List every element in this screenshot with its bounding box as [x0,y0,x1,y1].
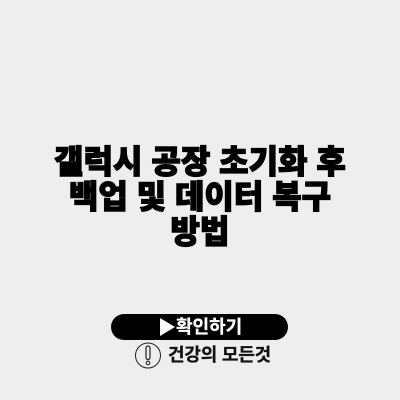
icon: exclamation circle [135,342,161,368]
title: 갤럭시 공장 초기화 후 [54,144,346,180]
brand name: 건강의 모든것 [168,345,271,365]
button: confirm [111,314,288,340]
icon: play triangle [160,318,175,336]
title: 백업 및 데이터 복구 [69,179,331,215]
button label: 확인하기 [176,317,242,337]
title: 방법 [171,214,229,250]
brand: logo and name [135,342,271,368]
title [54,144,346,250]
